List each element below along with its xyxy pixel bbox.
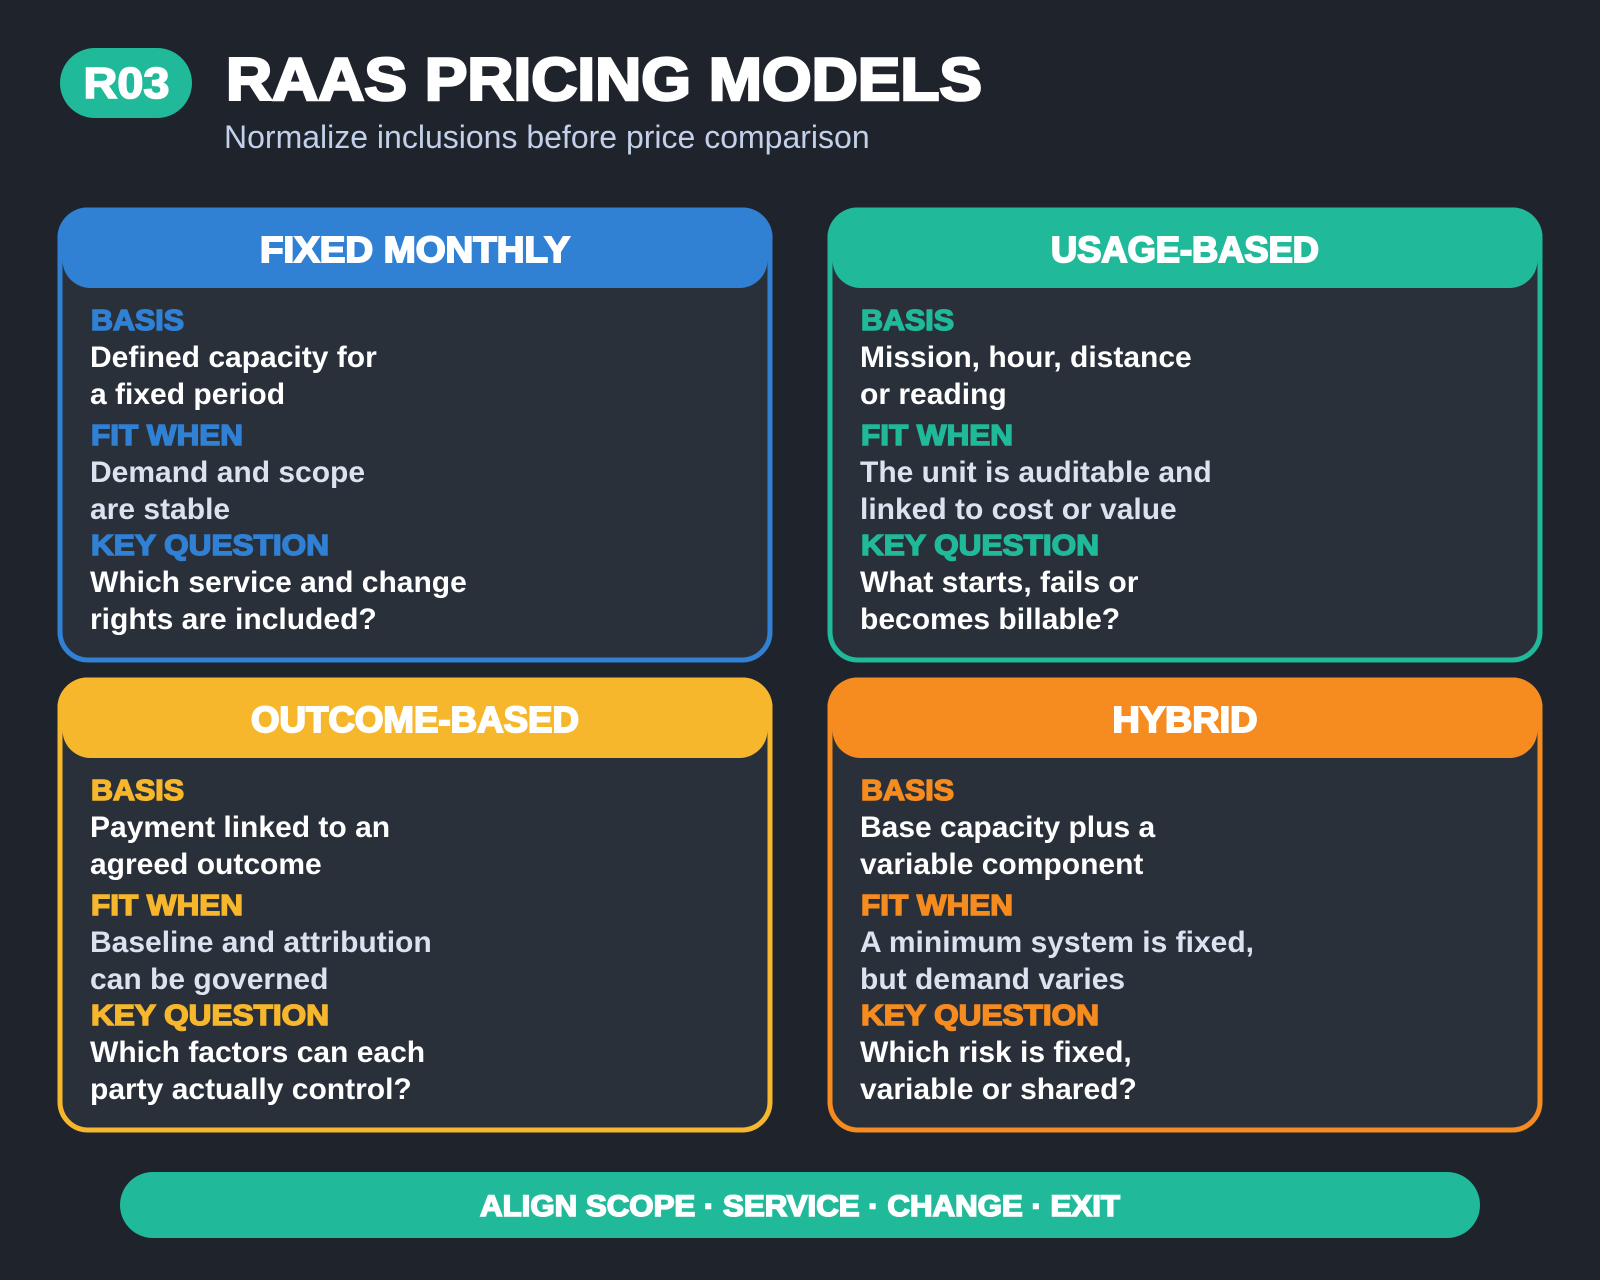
section: basis: Mission, hour, distance [860, 341, 1192, 374]
section: fit when [860, 890, 1254, 996]
header: fixed monthly: FIXED MONTHLY [260, 229, 570, 270]
section: key question [860, 1000, 1137, 1106]
header: outcome-based [57, 677, 773, 758]
header: usage-based [827, 208, 1543, 288]
footer banner: ALIGN SCOPE · SERVICE · CHANGE · EXIT [480, 1190, 1120, 1223]
section: fit when: The unit is auditable and [860, 456, 1212, 489]
header: outcome-based: OUTCOME-BASED [251, 699, 579, 740]
section: basis [90, 775, 390, 881]
header: hybrid [827, 678, 1543, 758]
section: basis: a fixed period [90, 378, 285, 411]
section: key question: Which service and change [90, 566, 467, 599]
header: hybrid: HYBRID [1112, 699, 1258, 740]
title: RAAS PRICING MODELS [226, 46, 982, 113]
section: key question: KEY QUESTION [861, 1000, 1099, 1032]
section: basis [90, 305, 377, 411]
section: fit when: Baseline and attribution [90, 926, 432, 959]
section: fit when: but demand varies [860, 963, 1125, 996]
section: key question: Which factors can each [90, 1036, 425, 1069]
section: fit when: A minimum system is fixed, [860, 926, 1254, 959]
section: key question [860, 530, 1139, 636]
section: fit when [90, 420, 365, 526]
panel: hybrid [827, 678, 1543, 1130]
section: key question: KEY QUESTION [861, 530, 1099, 562]
section: key question: What starts, fails or [860, 566, 1139, 599]
section: fit when: FIT WHEN [861, 890, 1013, 922]
section: basis: Defined capacity for [90, 341, 377, 374]
panel: fixed monthly [57, 208, 773, 660]
section: basis [860, 775, 1155, 881]
footer banner [120, 1172, 1480, 1238]
header: usage-based: USAGE-BASED [1051, 229, 1319, 270]
section: key question [90, 1000, 425, 1106]
header: fixed monthly [57, 208, 773, 288]
section: fit when: FIT WHEN [861, 420, 1013, 452]
section: fit when: FIT WHEN [91, 420, 243, 452]
section: basis: BASIS [861, 305, 954, 337]
section: fit when: are stable [90, 493, 230, 526]
section: key question: variable or shared? [860, 1073, 1137, 1106]
section: key question: rights are included? [90, 603, 377, 636]
section: basis: variable component [860, 848, 1143, 881]
section: key question: becomes billable? [860, 603, 1120, 636]
panel: outcome-based [57, 677, 773, 1130]
badge: R03 [60, 48, 192, 118]
subtitle: Normalize inclusions before price comparison [224, 119, 870, 155]
section: basis: BASIS [91, 775, 184, 807]
section: key question: party actually control? [90, 1073, 412, 1106]
section: fit when: FIT WHEN [91, 890, 243, 922]
section: basis: Payment linked to an [90, 811, 390, 844]
section: basis [860, 305, 1192, 411]
section: basis: agreed outcome [90, 848, 322, 881]
section: basis: BASIS [91, 305, 184, 337]
section: fit when: Demand and scope [90, 456, 365, 489]
section: fit when [860, 420, 1212, 526]
section: key question: KEY QUESTION [91, 1000, 329, 1032]
section: key question: Which risk is fixed, [860, 1036, 1132, 1069]
section: key question: KEY QUESTION [91, 530, 329, 562]
panel: usage-based [827, 208, 1543, 660]
section: fit when [90, 890, 432, 996]
section: basis: or reading [860, 378, 1007, 411]
section: fit when: can be governed [90, 963, 328, 996]
section: key question [90, 530, 467, 636]
section: basis: BASIS [861, 775, 954, 807]
badge: R03: R03 [84, 59, 170, 108]
section: basis: Base capacity plus a [860, 811, 1155, 844]
section: fit when: linked to cost or value [860, 493, 1177, 526]
